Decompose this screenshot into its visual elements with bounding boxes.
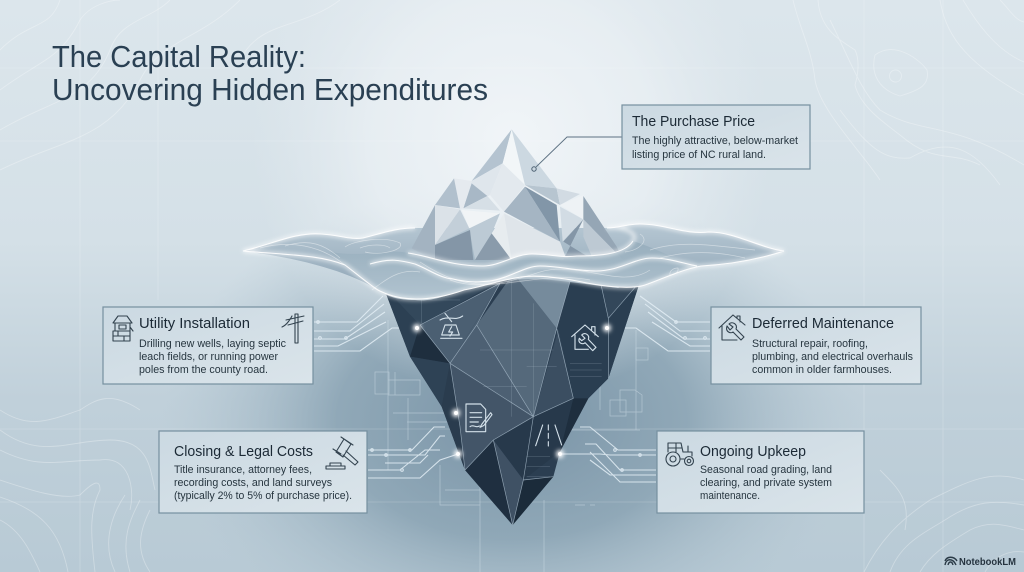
panel: ongoing upkeep: Ongoing Upkeep (700, 443, 806, 460)
panel: deferred maintenance: Structural repair, roofing, (752, 338, 868, 350)
panel: closing and legal costs: Closing & Legal Costs (174, 443, 313, 460)
icon: power pole (282, 314, 304, 343)
iceberg icon: power tower (440, 313, 463, 338)
panel: the purchase price: The Purchase Price (632, 113, 755, 130)
circuit traces: lower left (368, 427, 458, 478)
panel: closing and legal costs: recording costs, and land surveys (174, 477, 332, 489)
icon: tractor (666, 443, 694, 466)
panel: the purchase price: listing price of NC rural land. (632, 149, 766, 161)
panel: deferred maintenance: plumbing, and electrical overhauls (752, 351, 913, 363)
panel: deferred maintenance: common in older farmhouses. (752, 364, 892, 376)
panel: ongoing upkeep: Seasonal road grading, land (700, 464, 832, 476)
panel: utility installation: leach fields, or running power (139, 351, 278, 363)
panel: ongoing upkeep: clearing, and private system (700, 477, 832, 489)
title (52, 39, 488, 107)
panel: utility installation: poles from the county road. (139, 364, 268, 376)
leader line: purchase price (532, 137, 622, 171)
iceberg underwater (383, 270, 640, 525)
panel: closing and legal costs: Title insurance, attorney fees, (174, 464, 312, 476)
water surface: front layer (243, 224, 784, 300)
panel: closing and legal costs (159, 431, 367, 513)
title: Uncovering Hidden Expenditures (52, 72, 488, 107)
iceberg icon: road (536, 425, 562, 446)
circuit traces: upper right (607, 296, 710, 351)
panel: the purchase price: The highly attractive, below-market (632, 135, 799, 147)
iceberg icon: house with wrench (572, 325, 598, 351)
iceberg tip above water (412, 129, 623, 260)
connector nodes (413, 324, 611, 458)
water surface: back layer (243, 224, 784, 299)
panel: deferred maintenance: Deferred Maintenance (752, 315, 894, 332)
blueprint lines behind iceberg (375, 320, 648, 572)
panel: utility installation (103, 307, 313, 384)
icon: well (113, 316, 133, 341)
circuit traces: lower right (560, 427, 656, 482)
panel: utility installation: Drilling new wells, laying septic (139, 338, 286, 350)
circuit traces: upper left (314, 296, 417, 351)
panel: the purchase price (622, 105, 810, 169)
icon: gavel (326, 437, 358, 469)
panel: deferred maintenance (711, 307, 921, 384)
title: The Capital Reality: (52, 39, 306, 74)
panel: closing and legal costs: (typically 2% to 5% of purchase price). (174, 490, 352, 502)
panel: ongoing upkeep: maintenance. (700, 490, 760, 502)
panel: ongoing upkeep (657, 431, 864, 513)
panel: utility installation: Utility Installation (139, 315, 250, 332)
icon: house with wrench (719, 315, 745, 340)
NotebookLM logo: NotebookLM (959, 556, 1016, 568)
iceberg icon: document with pen (466, 404, 492, 432)
